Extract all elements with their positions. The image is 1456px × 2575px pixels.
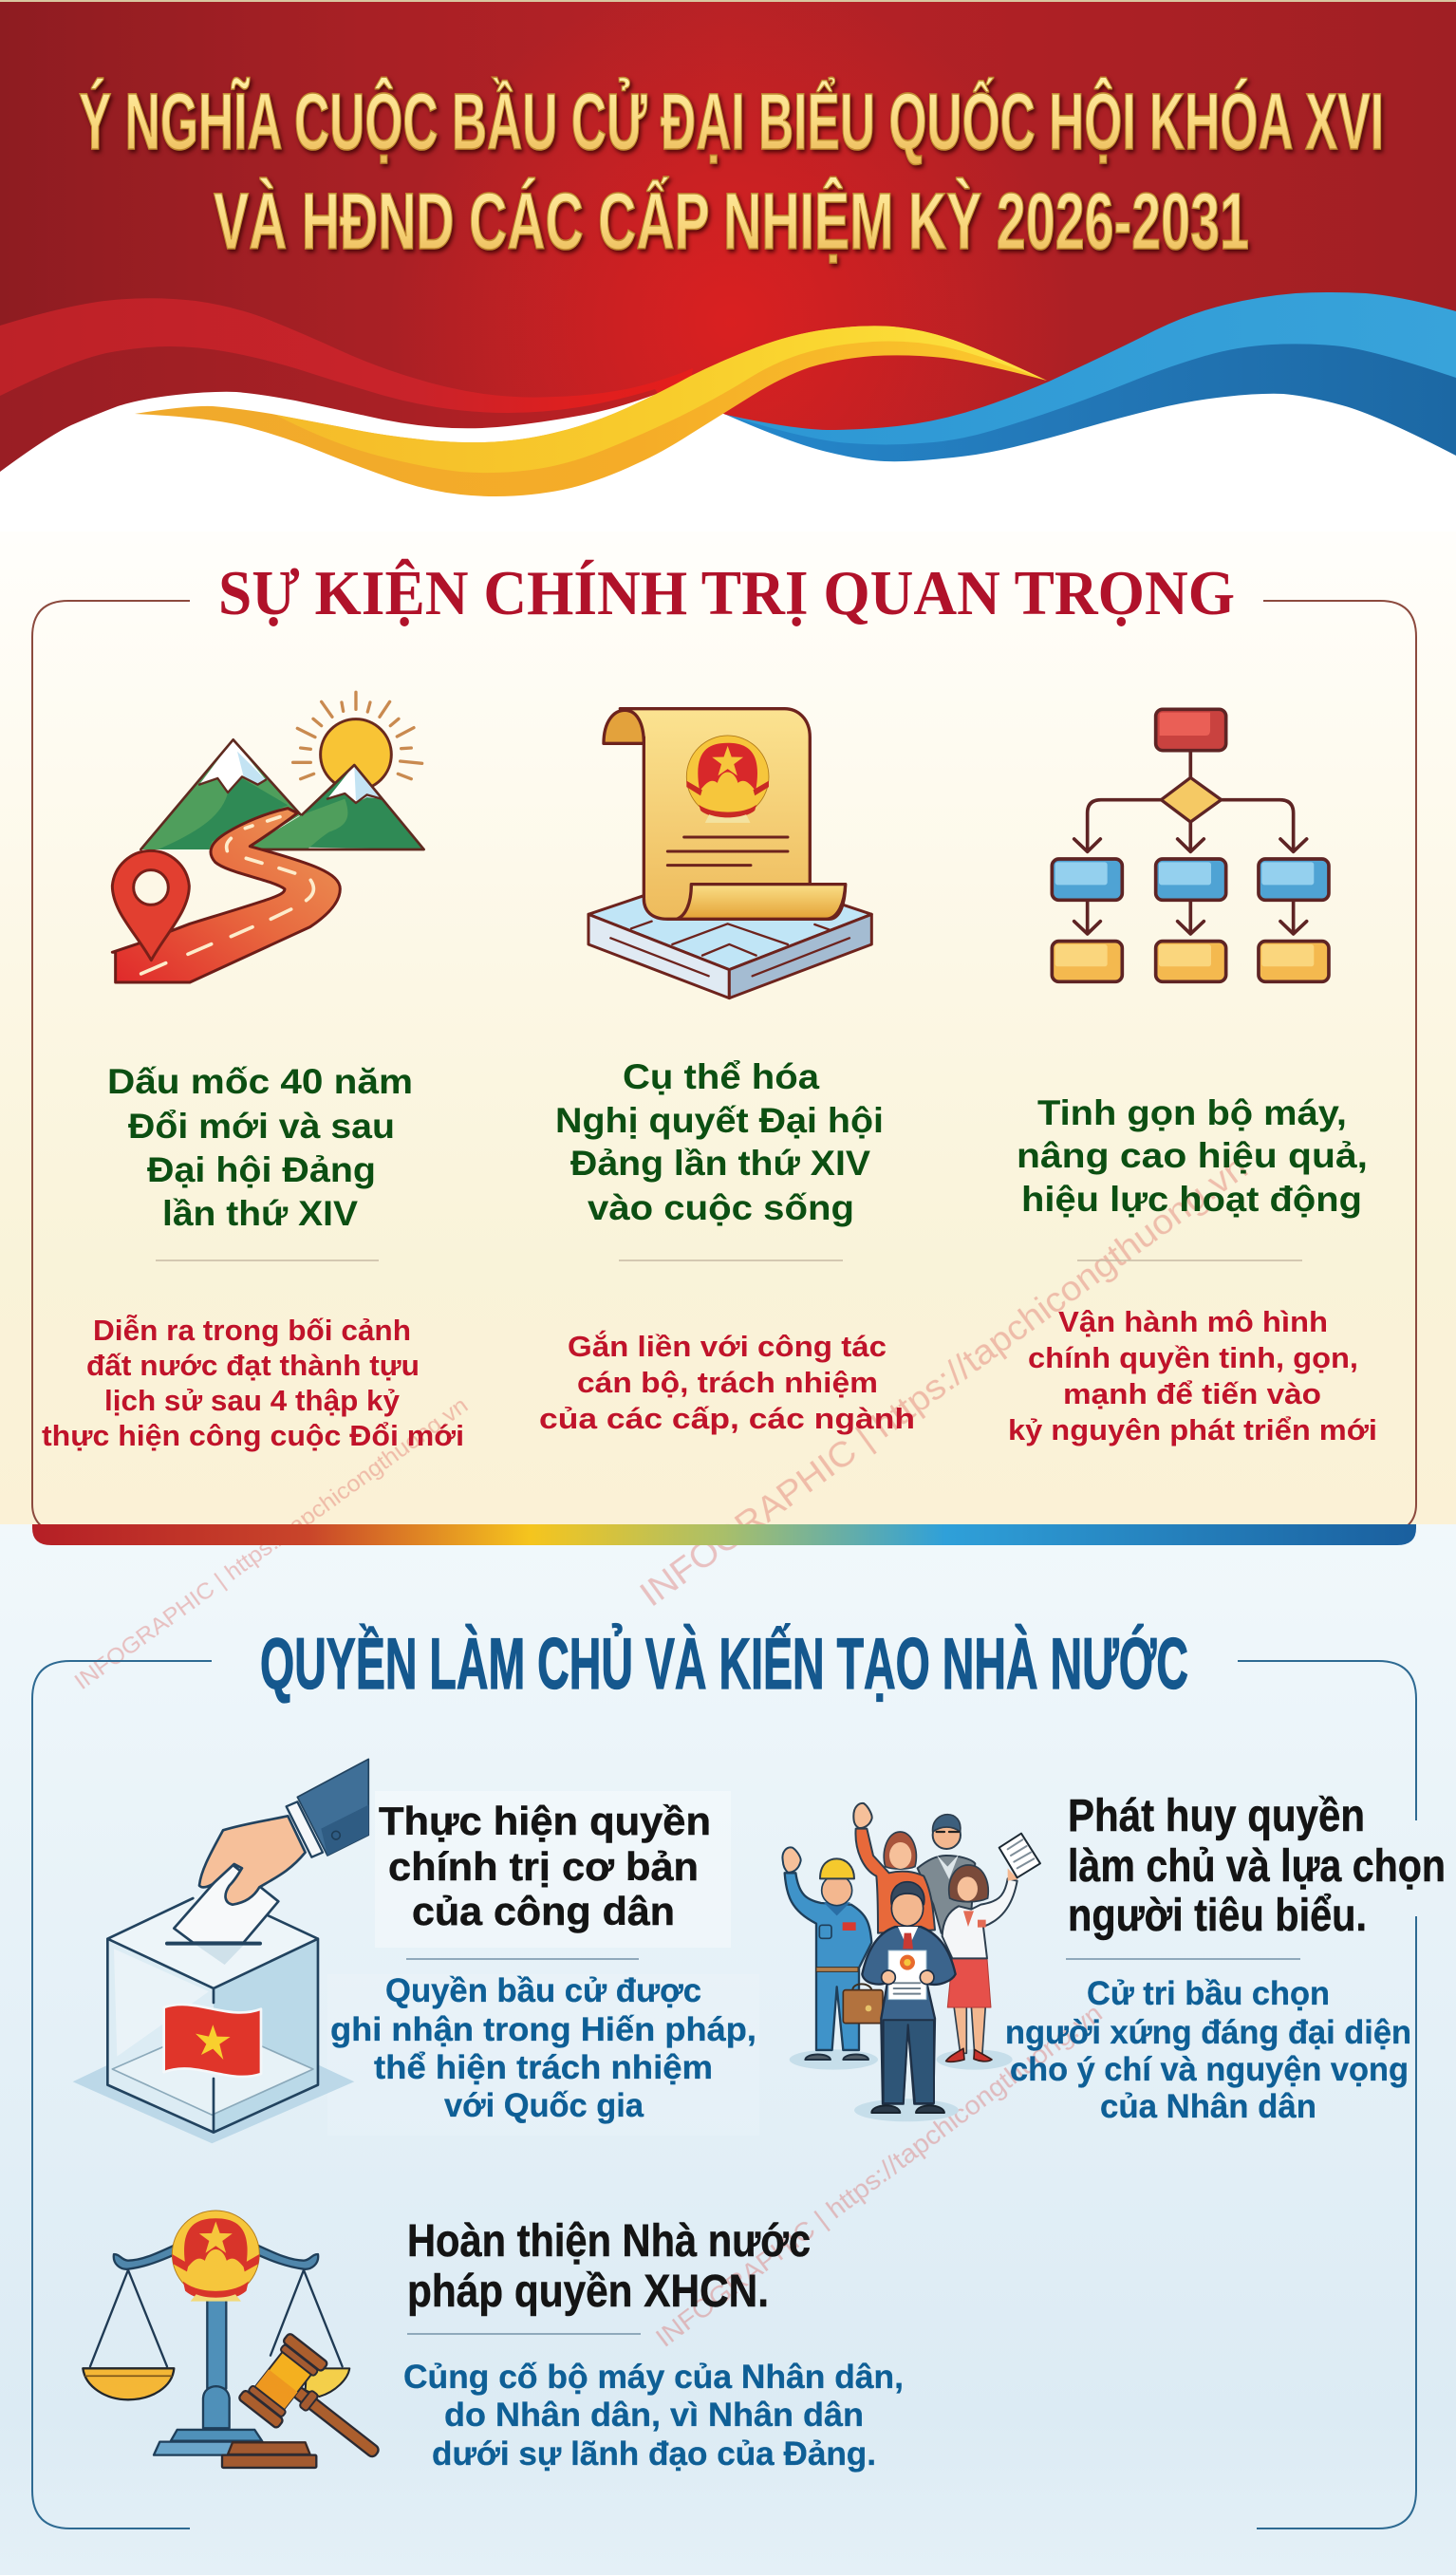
- gradient bar under panel: [32, 1524, 1416, 1545]
- emblem: [686, 736, 769, 823]
- worker: [782, 1847, 871, 2060]
- yellow ribbon: [135, 326, 1047, 496]
- icon: scales and gavel: [83, 2211, 402, 2487]
- text: first right heading: Thực hiện quyền: [379, 1799, 711, 1843]
- text: third heading: Hoàn thiện Nhà nước: [407, 2216, 811, 2267]
- column 1 description: đất nước đạt thành tựu: [86, 1349, 420, 1382]
- text: second right description: Cử tri bầu chọn: [1087, 1975, 1330, 2012]
- column 3 description: kỷ nguyên phát triển mới: [1008, 1413, 1377, 1446]
- heading: political event: SỰ KIỆN CHÍNH TRỊ QUAN TRỌNG: [218, 558, 1235, 628]
- column 2 description: của các cấp, các ngành: [539, 1402, 915, 1435]
- panel: political event frame: [32, 601, 1416, 1530]
- column 1 heading: [107, 1062, 413, 1233]
- text: second right heading: Phát huy quyền: [1068, 1791, 1365, 1841]
- icon: ballot box: [73, 1759, 368, 2143]
- icon: flow chart: [1052, 709, 1329, 981]
- column 1 description: lịch sử sau 4 thập kỷ: [104, 1384, 401, 1417]
- gavel: [238, 2333, 402, 2487]
- text: first right description: Quyền bầu cử được: [385, 1972, 701, 2009]
- column 1 description: Diễn ra trong bối cảnh: [93, 1314, 411, 1347]
- text: first right heading: chính trị cơ bản: [388, 1844, 699, 1889]
- watermarks: INFOGRAPHIC | https://tapchicongthuong.vn: [633, 1148, 1255, 1614]
- column 2 heading: [555, 1057, 884, 1227]
- column 2 heading: Đảng lần thứ XIV: [570, 1144, 870, 1183]
- column 2 description: Gắn liền với công tác: [568, 1329, 887, 1363]
- text: third description: do Nhân dân, vì Nhân dân: [444, 2397, 864, 2434]
- woman in orange: [853, 1803, 935, 1933]
- column 3 description: [1008, 1305, 1377, 1446]
- column 1 description: [42, 1314, 464, 1452]
- text: first right description: thể hiện trách nhiệm: [374, 2049, 713, 2086]
- text: second right heading: [1068, 1791, 1446, 1941]
- emblem: [172, 2211, 259, 2302]
- column 1 heading: Đổi mới và sau: [128, 1107, 395, 1146]
- text: first right description: [330, 1972, 756, 2124]
- panel: people's mastery frame: [32, 1661, 1416, 2528]
- header banner with ribbons: [0, 0, 1456, 532]
- text: second right description: người xứng đáng đại diện: [1005, 2014, 1411, 2051]
- briefcase: [843, 1984, 883, 2024]
- column 3 heading: hiệu lực hoạt động: [1021, 1180, 1362, 1219]
- column 2 description: cán bộ, trách nhiệm: [577, 1366, 878, 1399]
- column 3 heading: Tinh gọn bộ máy,: [1037, 1093, 1347, 1132]
- white wave: [0, 391, 1456, 532]
- text: third description: dưới sự lãnh đạo của Đảng.: [432, 2435, 876, 2472]
- column 3 heading: nâng cao hiệu quả,: [1017, 1136, 1368, 1175]
- text: third heading: [407, 2216, 811, 2317]
- watermarks: INFOGRAPHIC | https://tapchicongthuong.vn: [650, 1998, 1108, 2353]
- title: [79, 77, 1384, 266]
- text: second right description: cho ý chí và nguyện vọng: [1010, 2051, 1409, 2088]
- column 1 description: thực hiện công cuộc Đổi mới: [42, 1419, 464, 1452]
- text: first right heading: [379, 1799, 711, 1933]
- man with glasses: [918, 1815, 975, 1933]
- column 2 heading: Cụ thể hóa: [623, 1057, 819, 1096]
- column 2 heading: Nghị quyết Đại hội: [555, 1101, 884, 1140]
- blue ribbon: [726, 292, 1456, 494]
- page background: cream upper part: [0, 456, 1456, 1528]
- column 3 description: mạnh để tiến vào: [1063, 1377, 1321, 1410]
- column 3 heading: [1017, 1093, 1368, 1219]
- watermarks: INFOGRAPHIC | https://tapchicongthuong.vn: [70, 1392, 473, 1695]
- column 3 description: Vận hành mô hình: [1058, 1305, 1328, 1338]
- text: first right description: với Quốc gia: [444, 2087, 644, 2124]
- column 1 heading: Dấu mốc 40 năm: [107, 1062, 413, 1101]
- text: second right description: [1005, 1975, 1411, 2125]
- column 1 heading: Đại hội Đảng: [147, 1150, 376, 1189]
- text: second right description: của Nhân dân: [1100, 2088, 1316, 2125]
- column 3 description: chính quyền tinh, gọn,: [1028, 1341, 1358, 1374]
- front man: [862, 1882, 956, 2113]
- icon: group of voters: [782, 1803, 1040, 2121]
- text: third heading: pháp quyền XHCN.: [407, 2267, 769, 2317]
- icon: scroll on map base: [588, 709, 871, 998]
- column 2 heading: vào cuộc sống: [588, 1188, 854, 1227]
- text: first right description: ghi nhận trong Hiến pháp,: [330, 2011, 756, 2048]
- watermarks: [70, 1148, 1255, 2353]
- text: first right heading: của công dân: [412, 1889, 675, 1933]
- red ribbon: [0, 298, 693, 494]
- text: second right heading: người tiêu biểu.: [1068, 1891, 1367, 1941]
- page background: pale blue lower part: [0, 1524, 1456, 2575]
- column 2 description: [539, 1329, 915, 1435]
- text: third description: Củng cố bộ máy của Nhân dân,: [403, 2359, 904, 2396]
- woman in white: [943, 1834, 1040, 2062]
- column 1 heading: lần thứ XIV: [162, 1194, 358, 1233]
- icon: road mountains sun: [112, 692, 424, 982]
- text: third description: [403, 2359, 904, 2472]
